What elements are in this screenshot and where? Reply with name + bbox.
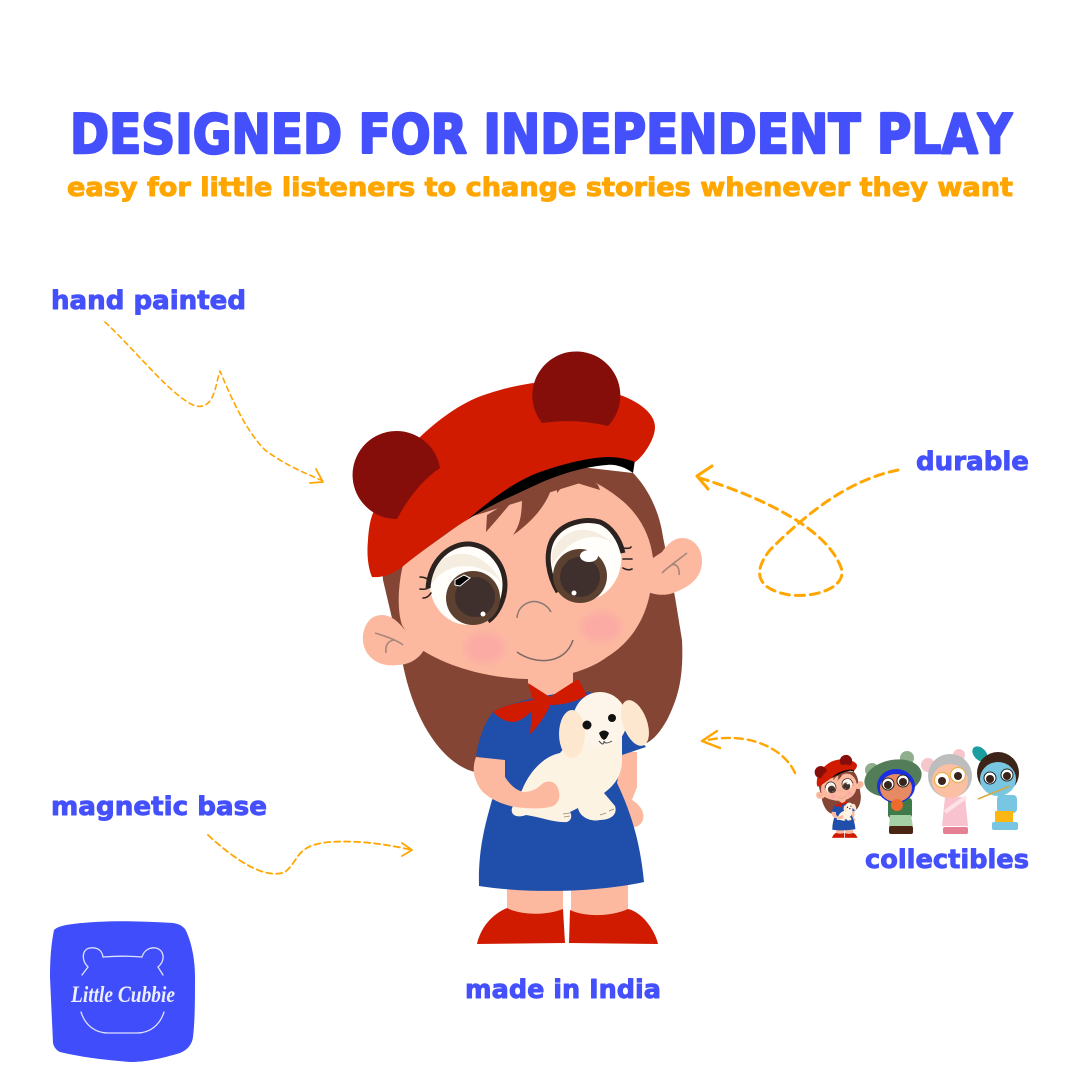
collectibles figures [815, 743, 1019, 838]
label: hand painted: hand painted [51, 286, 246, 316]
figure: blue boy with flute [969, 743, 1019, 830]
figure: grandmother [921, 749, 972, 834]
arrow: durable [697, 466, 898, 595]
subtitle: easy for little listeners to change stories whenever they want [67, 173, 1013, 203]
arrow: magnetic base [208, 835, 412, 874]
label: durable: durable [916, 447, 1029, 477]
arrow: collectibles [702, 731, 795, 773]
figure: explorer [861, 751, 925, 834]
label: collectibles: collectibles [865, 845, 1029, 875]
illustration: girl holding puppy [353, 351, 702, 944]
label: made in India: made in India [465, 975, 661, 1005]
arrow: hand painted [105, 322, 323, 483]
figure: girl [815, 755, 864, 838]
logo: Little Cubbie: Little Cubbie [70, 982, 175, 1007]
label: magnetic base: magnetic base [51, 792, 267, 822]
logo: Little Cubbie [50, 921, 195, 1062]
